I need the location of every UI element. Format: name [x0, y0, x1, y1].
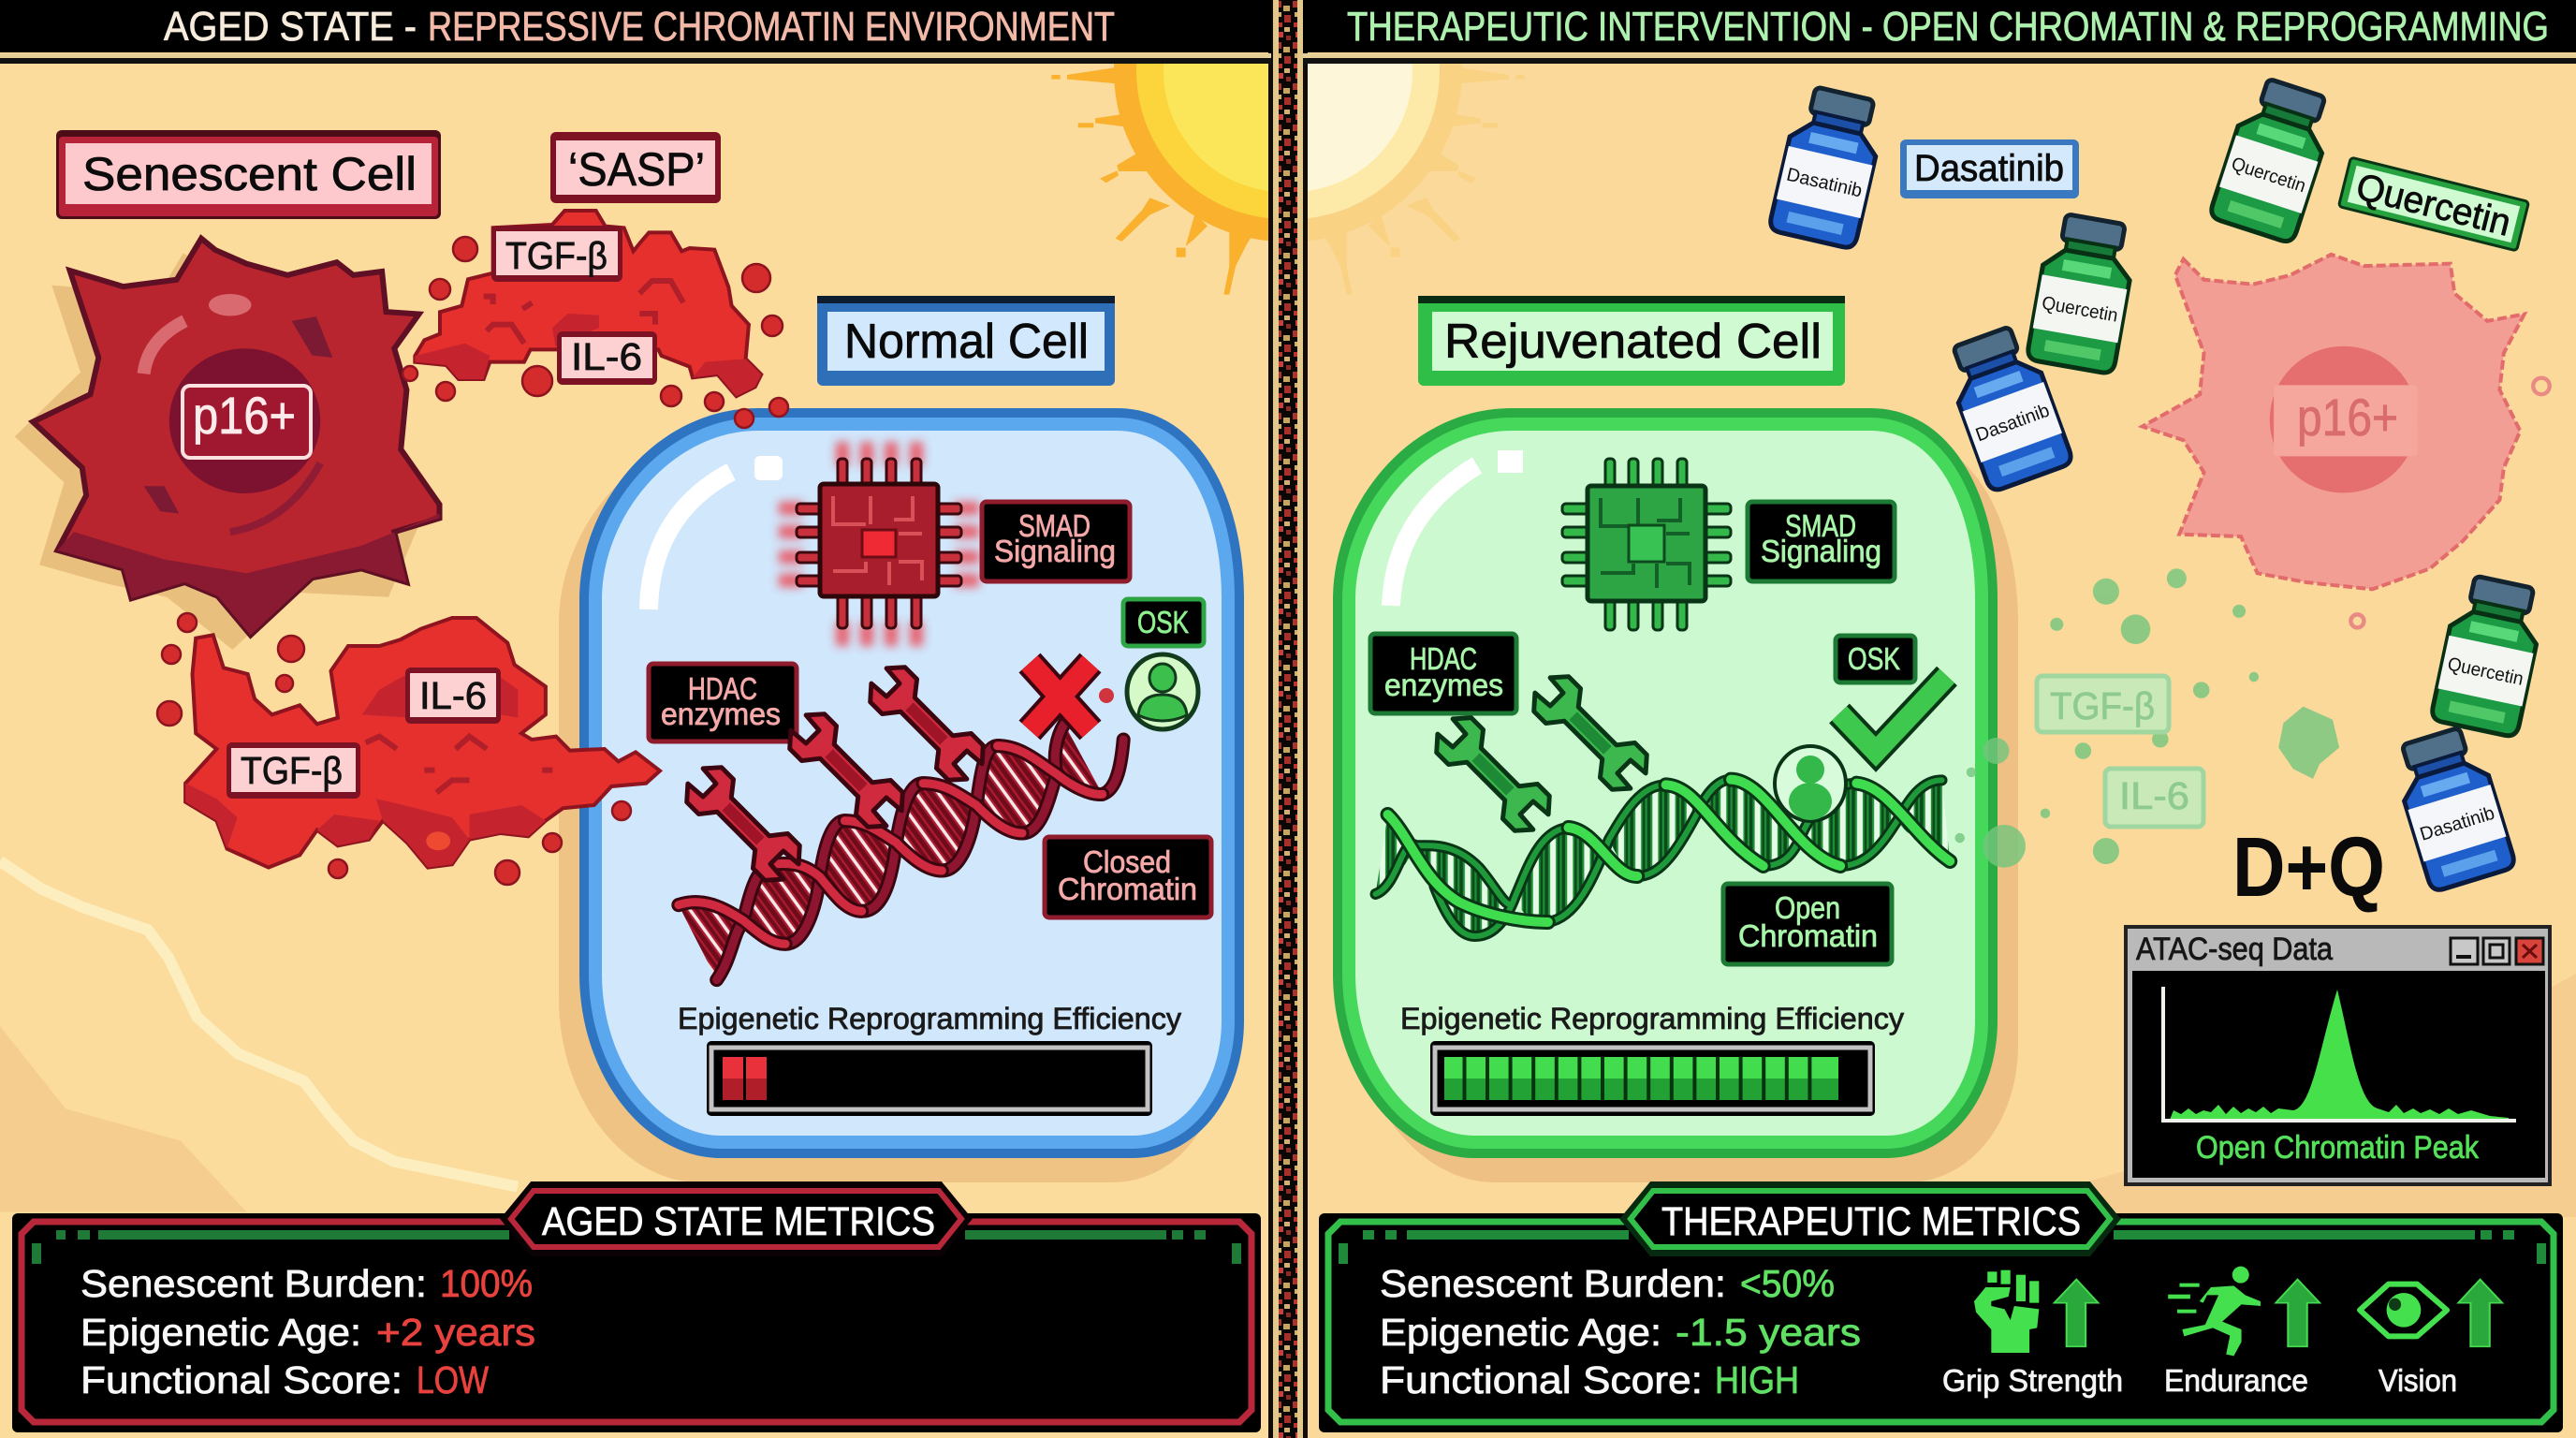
panel: therapeutic metrics — [1319, 1187, 2563, 1432]
label: IL-6 bottom — [405, 668, 501, 724]
icon: red chip — [779, 442, 979, 646]
bottle: Dasatinib 2 — [1939, 322, 2074, 492]
icon: grip arrow — [2055, 1280, 2099, 1346]
ghost droplets: pink — [2350, 378, 2550, 627]
label: SMAD Signaling therapeutic — [1748, 502, 1895, 581]
metrics heading tab — [507, 1187, 965, 1251]
label: Dasatinib: Dasatinib — [1914, 148, 2064, 189]
green debris — [1954, 568, 2339, 868]
ghost label: TGF-β: TGF-β — [2050, 684, 2155, 727]
metric lines: Epigenetic Age: — [1380, 1311, 1661, 1354]
label: TGF-β bottom — [227, 742, 360, 799]
metric lines: Epigenetic Age: — [80, 1311, 361, 1354]
metric lines: Functional Score: — [1380, 1358, 1703, 1401]
bottle: Quercetin 1: Quercetin — [2229, 154, 2308, 197]
label: Closed Chromatin: Closed — [1083, 844, 1171, 879]
label: HDAC enzymes therapeutic: HDAC — [1410, 641, 1477, 676]
metrics heading tab: THERAPEUTIC METRICS — [1661, 1199, 2081, 1244]
metric lines: Functional Score: — [80, 1358, 402, 1401]
metrics heading tab: AGED STATE METRICS — [542, 1199, 935, 1244]
icon: fist — [1974, 1270, 2039, 1353]
ghost senescent cell: p16+ — [2297, 388, 2398, 447]
metric lines: <50% — [1740, 1262, 1835, 1305]
icon: runner — [2168, 1267, 2261, 1356]
metric lines — [1380, 1262, 1861, 1401]
label: Rejuvenated Cell: Rejuvenated Cell — [1444, 315, 1822, 369]
label: efficiency aged: Epigenetic Reprogramming Efficiency — [678, 1002, 1181, 1035]
label: OSK therapeutic: OSK — [1848, 641, 1900, 676]
label: SMAD Signaling aged: SMAD — [1018, 508, 1090, 543]
bottle: Dasatinib 1 — [1768, 83, 1888, 250]
label: IL-6 top: IL-6 — [571, 335, 642, 378]
ghost label: TGF-β — [2037, 676, 2169, 732]
label: D+Q: D+Q — [2232, 821, 2385, 915]
header: aged state: AGED STATE - — [164, 4, 417, 50]
label: TGF-β top — [491, 226, 622, 282]
panel: aged state metrics — [12, 1187, 1261, 1432]
center divider — [1268, 0, 1308, 1438]
label: HDAC enzymes aged — [649, 664, 797, 741]
label: IL-6 top — [557, 331, 657, 385]
DNA therapeutic — [1376, 780, 1950, 936]
DNA aged — [679, 724, 1123, 980]
label: p16+: p16+ — [193, 386, 296, 445]
label: HDAC enzymes aged: HDAC — [688, 671, 757, 706]
label: Normal Cell: Normal Cell — [844, 315, 1089, 369]
window: ATAC-seq — [2124, 925, 2552, 1186]
window: ATAC-seq: Open Chromatin Peak — [2196, 1130, 2480, 1166]
bottle: Quercetin 3: Quercetin — [2446, 653, 2525, 690]
label: SASP: ‘SASP’ — [568, 143, 705, 196]
SASP cloud: top — [415, 211, 761, 396]
label: Dasatinib — [1900, 139, 2079, 198]
header: aged state — [0, 0, 1271, 64]
label: Closed Chromatin — [1045, 837, 1211, 917]
ghost senescent cell — [2143, 255, 2525, 589]
metric lines: LOW — [417, 1358, 489, 1401]
bottle: Dasatinib 3: Dasatinib — [2418, 803, 2497, 845]
SASP droplets — [157, 237, 788, 885]
label: Rejuvenated Cell — [1418, 296, 1845, 386]
metric lines: Senescent Burden: — [80, 1262, 427, 1305]
bottle: Quercetin 2 — [2027, 212, 2139, 374]
metric lines — [80, 1262, 535, 1401]
label: Open Chromatin: Open — [1775, 890, 1840, 925]
bar: efficiency therapeutic — [1430, 1041, 1875, 1116]
label: OSK therapeutic — [1836, 636, 1915, 682]
wrenches aged — [678, 658, 992, 889]
label: SMAD Signaling therapeutic: Signaling — [1761, 534, 1881, 568]
label: OSK aged — [1123, 599, 1204, 646]
window buttons — [2451, 938, 2543, 964]
SASP cloud: bottom — [185, 618, 660, 868]
bottle: Dasatinib 1: Dasatinib — [1785, 165, 1864, 201]
bottle: Dasatinib 3 — [2389, 724, 2516, 892]
bottle: Quercetin 3 — [2430, 573, 2548, 738]
label: Senescent Cell: Senescent Cell — [82, 148, 417, 200]
icon: eye — [2360, 1284, 2447, 1336]
label: Open Chromatin: Chromatin — [1738, 918, 1878, 953]
icon: red X — [1030, 663, 1114, 730]
senescent cell — [15, 239, 440, 650]
label: SMAD Signaling aged — [982, 502, 1130, 581]
ghost label: IL-6: IL-6 — [2119, 774, 2189, 817]
label: Open Chromatin — [1723, 884, 1892, 964]
icon: green chip — [1562, 459, 1731, 630]
normal cell body — [559, 408, 1244, 1182]
ghost label: IL-6 — [2105, 769, 2203, 827]
label: Senescent Cell — [56, 130, 441, 219]
label: Grip Strength: Grip Strength — [1942, 1363, 2123, 1398]
label: Quercetin: Quercetin — [2352, 166, 2515, 244]
chart: open chromatin peak — [2163, 987, 2516, 1121]
wrench shafts aged — [722, 702, 948, 845]
label: HDAC enzymes aged: enzymes — [661, 697, 781, 731]
label: TGF-β top: TGF-β — [505, 234, 607, 277]
panel background: therapeutic — [1308, 64, 2576, 1217]
metric lines: +2 years — [376, 1311, 535, 1354]
label: Closed Chromatin: Chromatin — [1058, 872, 1197, 906]
window: ATAC-seq: ATAC-seq Data — [2136, 932, 2333, 967]
label: Endurance: Endurance — [2164, 1363, 2308, 1398]
header: aged state: REPRESSIVE CHROMATIN ENVIRONMENT — [428, 4, 1115, 50]
label: OSK aged: OSK — [1137, 605, 1189, 639]
label: HDAC enzymes therapeutic — [1370, 634, 1516, 713]
label: SASP — [550, 132, 721, 203]
label: Vision: Vision — [2378, 1363, 2457, 1398]
wrenches therapeutic — [1427, 668, 1656, 840]
label: TGF-β bottom: TGF-β — [241, 749, 343, 792]
header: therapeutic — [1303, 0, 2576, 64]
label: SMAD Signaling therapeutic: SMAD — [1785, 508, 1856, 543]
icon: vision arrow — [2458, 1280, 2502, 1346]
icon: OSK person aged — [1127, 654, 1198, 729]
wrench shafts therapeutic — [1471, 712, 1612, 796]
metric lines: -1.5 years — [1676, 1311, 1861, 1354]
icon: OSK person therapeutic — [1775, 746, 1846, 821]
label: IL-6 bottom: IL-6 — [419, 674, 487, 717]
panel background: aged state — [0, 64, 1268, 1211]
bottle: Quercetin 1 — [2209, 74, 2338, 244]
metric lines: 100% — [440, 1262, 533, 1305]
label: SMAD Signaling aged: Signaling — [994, 534, 1116, 568]
label: Normal Cell — [817, 296, 1115, 386]
icon: green check — [1839, 676, 1947, 752]
rejuvenated cell body — [1333, 408, 2018, 1182]
label: HDAC enzymes therapeutic: enzymes — [1384, 668, 1503, 702]
bottle: Quercetin 2: Quercetin — [2041, 293, 2119, 327]
metric lines: Senescent Burden: — [1380, 1262, 1726, 1305]
label: efficiency therapeutic: Epigenetic Reprogramming Efficiency — [1400, 1002, 1904, 1035]
metrics heading tab — [1627, 1187, 2114, 1251]
metric lines: HIGH — [1715, 1358, 1799, 1401]
icon: endurance arrow — [2276, 1280, 2320, 1346]
bar: efficiency aged — [707, 1041, 1152, 1116]
bottle: Dasatinib 2: Dasatinib — [1973, 401, 2052, 446]
